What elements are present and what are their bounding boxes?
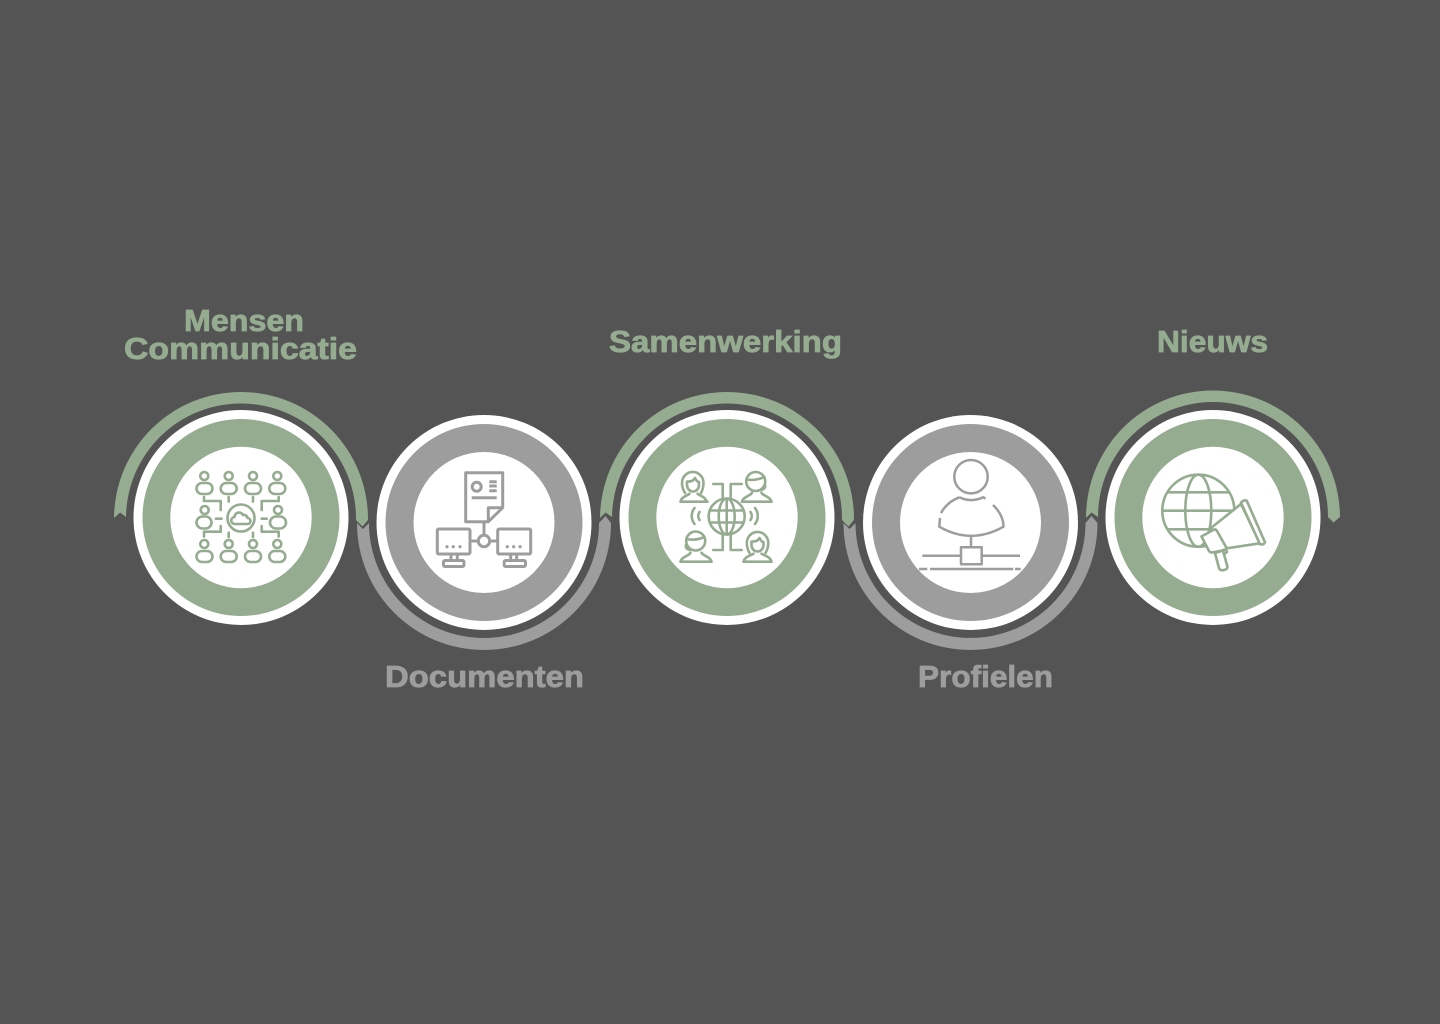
icon dots: computer screens	[445, 545, 522, 548]
icon: document shared between computers	[437, 473, 531, 566]
heading: Mensen Communicatie: Communicatie	[124, 331, 357, 366]
circle: Mensen Communicatie	[134, 410, 348, 625]
heading: Profielen: Profielen	[918, 659, 1053, 694]
circle: Nieuws	[1106, 410, 1320, 625]
heading: Documenten: Documenten	[385, 659, 584, 694]
heading: Nieuws: Nieuws	[1157, 324, 1268, 359]
heading: Samenwerking: Samenwerking	[609, 324, 842, 359]
arc: Mensen Communicatie	[114, 392, 368, 526]
arc: Profielen	[844, 516, 1098, 650]
arc: Nieuws	[1086, 390, 1340, 522]
icon: people around a globe	[680, 472, 772, 562]
heading: Mensen Communicatie: Mensen	[184, 303, 304, 338]
arc: Documenten	[357, 516, 611, 650]
icon: globe with megaphone	[1162, 475, 1265, 570]
arc: Samenwerking	[600, 392, 854, 526]
icon: people network with cloud	[196, 472, 286, 562]
icon: user profile on a network	[919, 460, 1021, 569]
circle: Profielen	[863, 415, 1078, 630]
circle: Documenten	[376, 415, 592, 630]
circle: Samenwerking	[620, 410, 834, 625]
heading: Mensen Communicatie	[124, 303, 357, 366]
